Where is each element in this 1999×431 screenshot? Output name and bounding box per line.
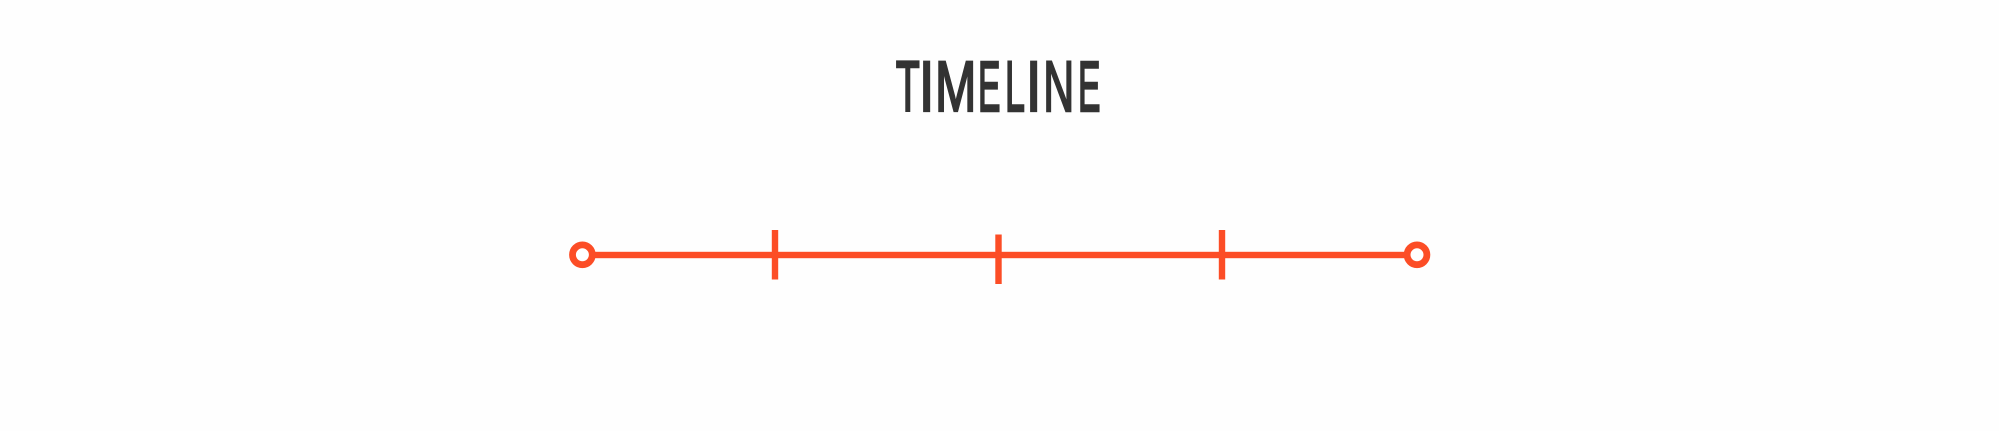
title: T	[896, 48, 920, 127]
tick 3	[1219, 230, 1225, 280]
end marker	[1407, 245, 1427, 265]
title: M	[935, 47, 976, 126]
title: E	[978, 47, 1000, 126]
title: I	[1026, 47, 1042, 126]
tick 1	[772, 230, 778, 280]
title: I	[919, 47, 935, 126]
title	[896, 46, 1100, 127]
start marker	[572, 245, 592, 265]
title: L	[1005, 46, 1025, 126]
title: N	[1043, 48, 1074, 127]
tick 2	[995, 234, 1002, 284]
title: E	[1078, 47, 1100, 126]
timeline axis line	[592, 252, 1407, 258]
